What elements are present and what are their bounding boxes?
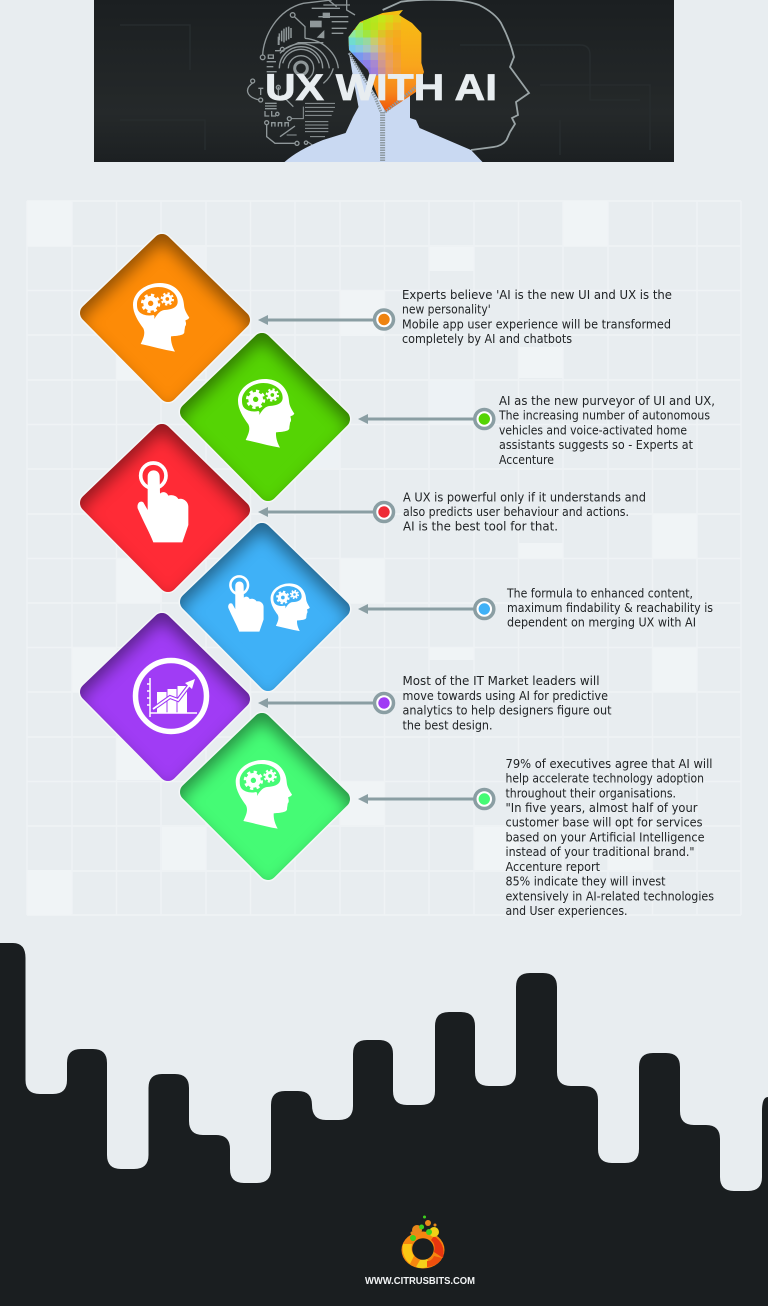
zipper (349, 53, 417, 162)
arrow: purple connector (258, 694, 394, 712)
human head profile outline (383, 0, 529, 150)
diamond: green (189, 342, 341, 492)
text: block one: new personality' (402, 303, 491, 317)
text: block four: The formula to enhanced content, (506, 586, 693, 600)
panel: background tile grid (27, 201, 741, 915)
logo bubbles (410, 1216, 439, 1241)
text: block six: 79% of executives agree that AI will (506, 757, 712, 771)
blue body silhouette (284, 53, 482, 162)
text: block four (506, 586, 713, 630)
icon: head with gears light green (236, 760, 292, 829)
arrow: red connector (258, 502, 394, 522)
text: block five (402, 674, 612, 732)
title: UX WITH AI (265, 67, 497, 108)
header banner (94, 0, 674, 162)
text: block two (498, 394, 715, 467)
footer: website url: WWW.CITRUSBITS.COM (365, 1276, 475, 1287)
text: block five: the best design. (402, 718, 492, 732)
text: block six: throughout their organisations. (506, 786, 676, 800)
text: block four: maximum findability & reachability is (507, 601, 713, 615)
text: block six: instead of your traditional brand." (506, 845, 694, 859)
arrow: orange connector (258, 310, 394, 329)
text: block three (403, 490, 646, 534)
banner background (94, 0, 674, 162)
text: block six: 85% indicate they will invest (506, 875, 666, 889)
text: block five: Most of the IT Market leaders will (402, 674, 600, 688)
text: block two: Accenture (499, 453, 554, 467)
arrow: green connector (358, 410, 494, 428)
text: block six: help accelerate technology adoption (506, 772, 704, 786)
text: block one: completely by AI and chatbots (402, 332, 572, 346)
text: block two: The increasing number of autonomous (498, 409, 710, 423)
text: block two: assistants suggests so - Experts at (499, 438, 693, 452)
icon: hand and head (228, 576, 310, 632)
diamond: blue (189, 532, 341, 682)
icon: tapping hand (137, 463, 188, 542)
diamond: red (89, 433, 241, 583)
text: block six: and User experiences. (506, 904, 628, 918)
text: block six: based on your Artificial Intelligence (506, 830, 704, 844)
text: block six: customer base will opt for services (506, 816, 702, 830)
diamond: light green (189, 722, 341, 871)
text: block one: Experts believe 'AI is the new UI and UX is the (402, 288, 672, 302)
faint background circuit (120, 25, 650, 155)
text: block six: Accenture report (506, 860, 600, 874)
text: block two: vehicles and voice-activated home (499, 423, 687, 437)
icon: head with gears (133, 283, 189, 352)
text: block three: also predicts user behaviour and actions. (403, 505, 629, 519)
arrow: light green connector (358, 790, 494, 808)
text: block three: AI is the best tool for that. (403, 520, 558, 534)
diamond: purple (89, 622, 241, 772)
text: block five: move towards using AI for predictive (402, 689, 608, 703)
text: block one (402, 288, 672, 346)
robot head circuit outline (248, 0, 355, 147)
text: block two: AI as the new purveyor of UI and UX, (499, 394, 715, 408)
logo: citrusbits (402, 1216, 444, 1268)
text: block six (506, 757, 714, 918)
icon: head with gears green (238, 379, 294, 448)
text: block five: analytics to help designers figure out (402, 704, 612, 718)
text: block one: Mobile app user experience will be transformed (402, 317, 671, 331)
text: block four: dependent on merging UX with AI (507, 616, 696, 630)
text: block six: extensively in AI-related technologies (506, 889, 714, 903)
logo ring hole (412, 1238, 434, 1260)
colourful mosaic face (348, 10, 424, 112)
text: block six: "In five years, almost half of your (506, 801, 698, 815)
diamond: orange (89, 243, 241, 393)
logo ring (402, 1232, 444, 1268)
arrow: blue connector (358, 600, 494, 618)
icon: growth chart in circle (136, 660, 206, 732)
footer: dark skyline (0, 943, 768, 1306)
text: block three: A UX is powerful only if it understands and (403, 490, 646, 504)
